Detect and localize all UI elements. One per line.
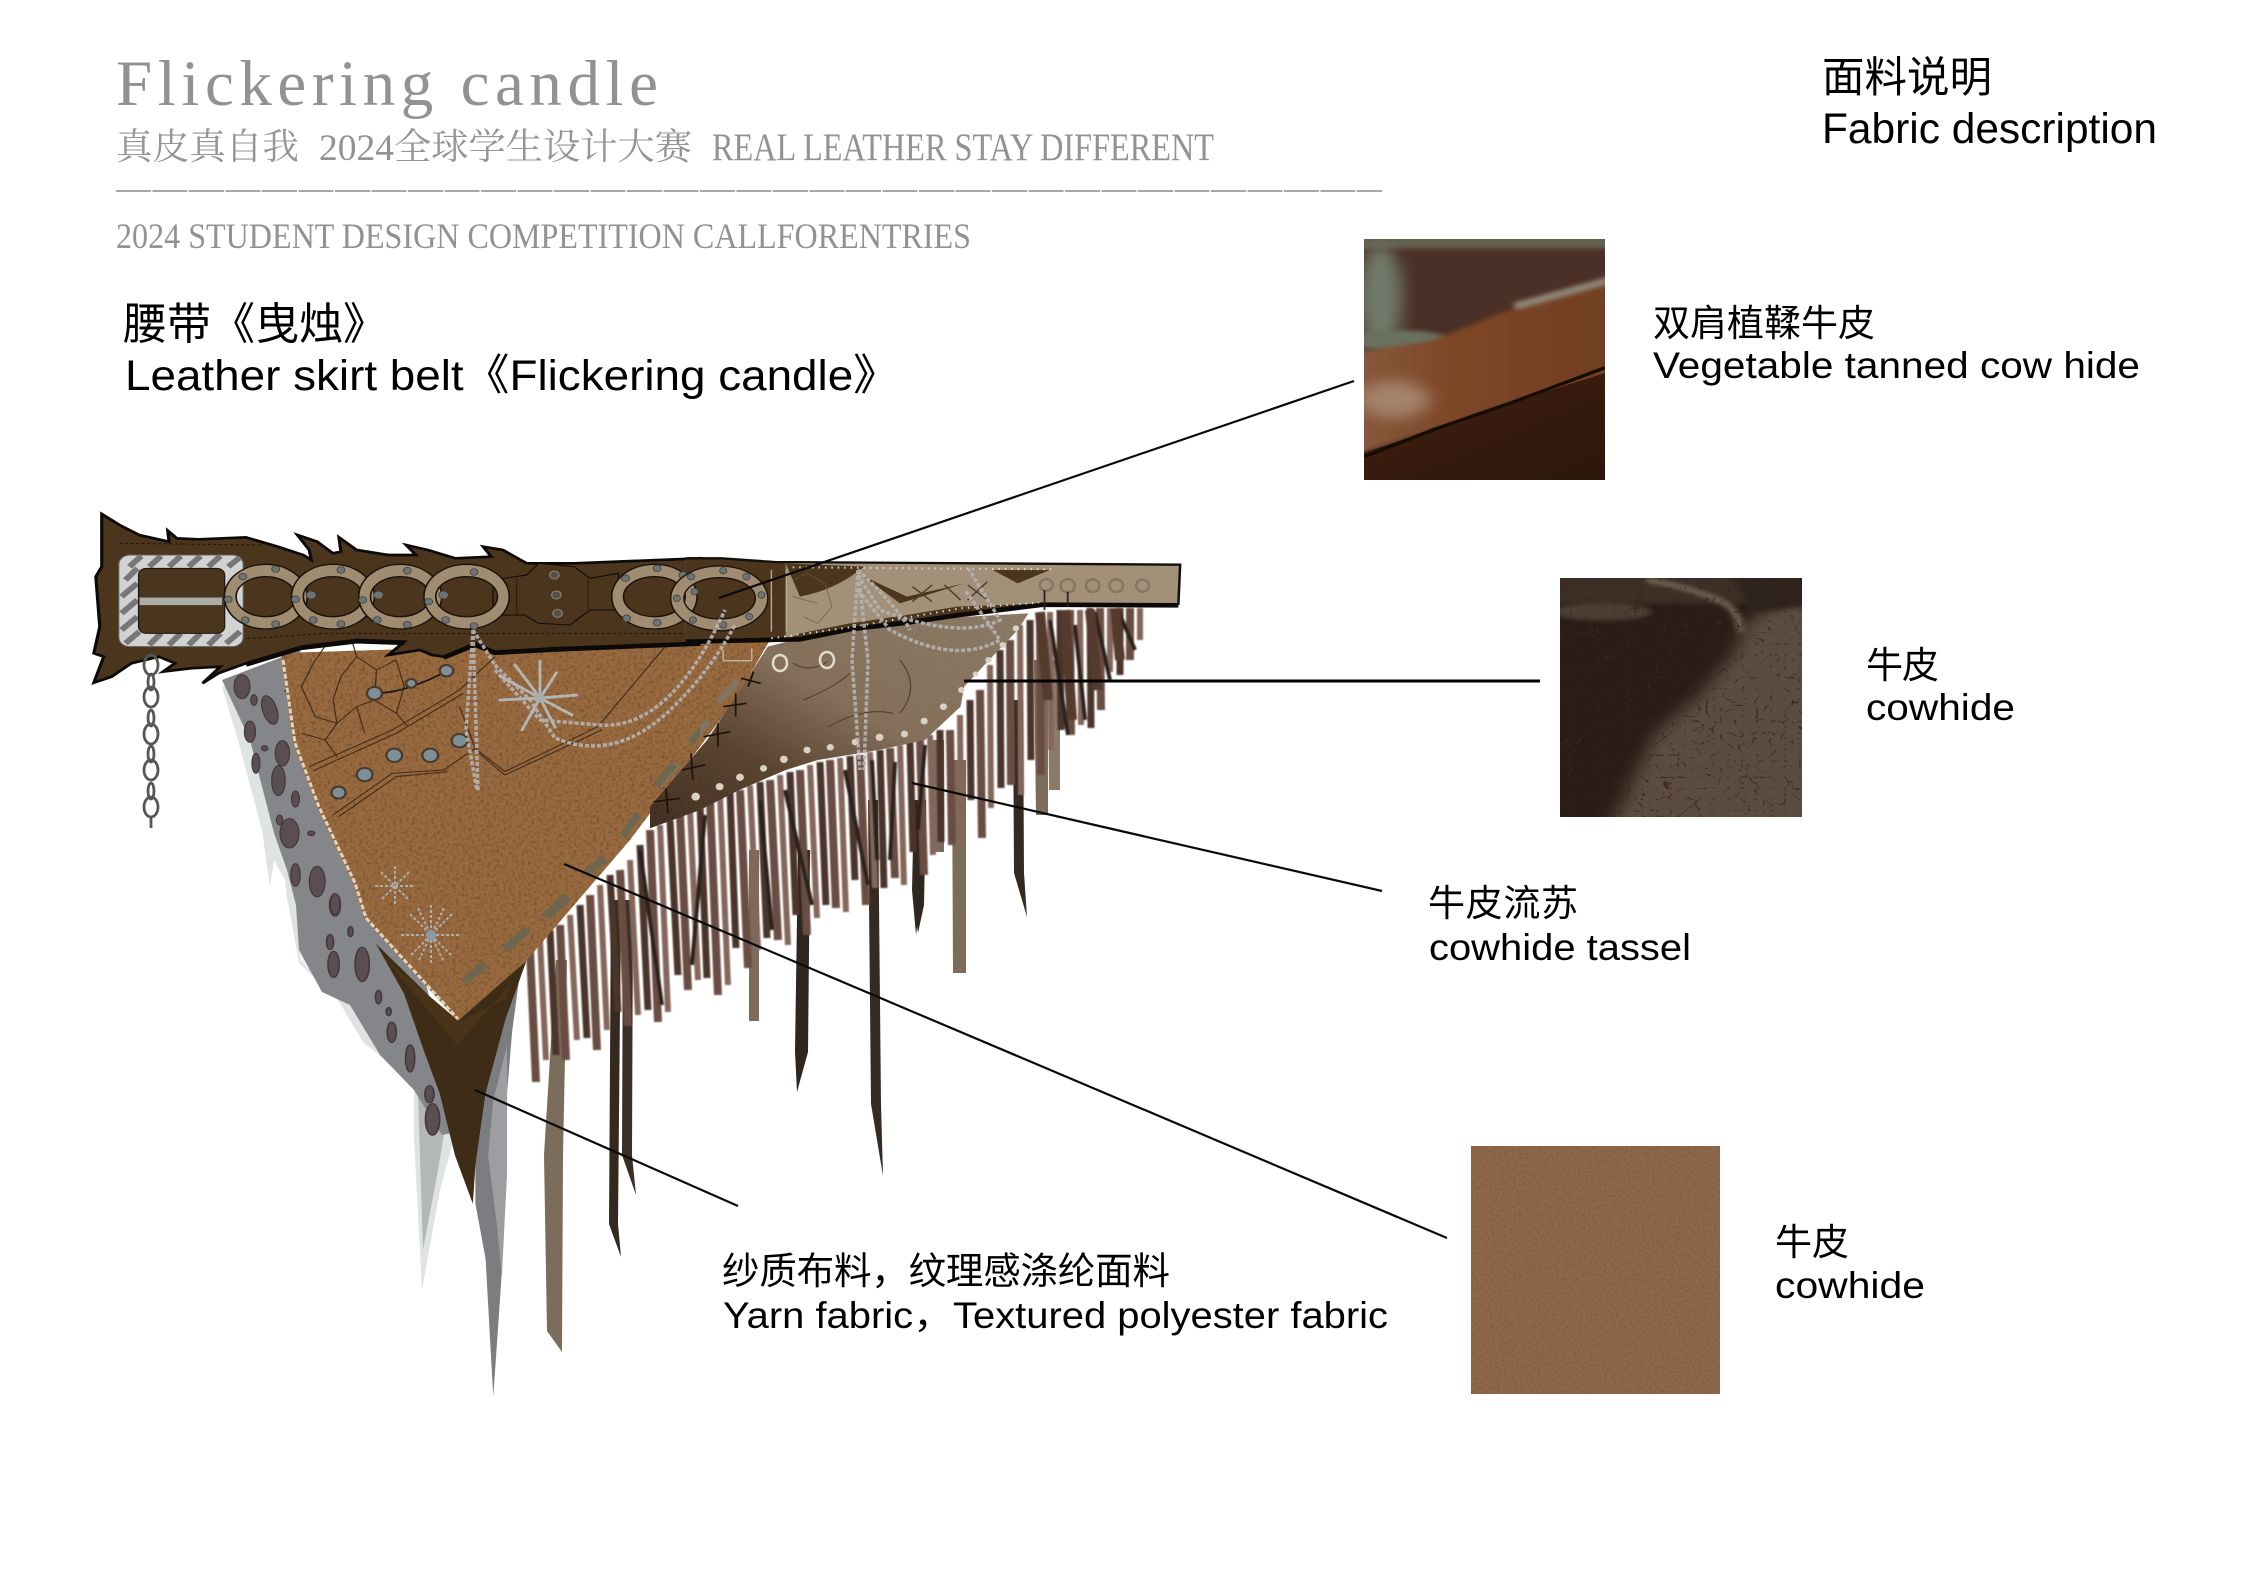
label: yarn fabric — [722, 1250, 1388, 1336]
studs on hem — [691, 625, 1019, 801]
label: cowhide: cowhide — [1866, 687, 2015, 728]
subtitle: competition name: 真皮真自我 — [116, 118, 299, 170]
swatch: brown cowhide — [1471, 1146, 1720, 1394]
leader line: yarn fabric — [475, 1090, 738, 1206]
stitches along panel edge — [460, 672, 761, 984]
heading: belt name: 腰带《曳烛》 — [123, 300, 387, 349]
belt chain rings — [224, 563, 768, 631]
leader line: vegetable tanned cow hide — [719, 381, 1354, 598]
long hanging strands — [544, 660, 1060, 1352]
leopard print panel — [222, 650, 456, 1135]
label: vegetable tanned cow hide — [1653, 303, 2140, 386]
grey fur layer — [222, 670, 455, 1290]
label: cowhide tassel: cowhide tassel — [1429, 927, 1691, 968]
label: yarn fabric: Yarn fabric，Textured polyester fabric — [723, 1295, 1388, 1336]
silver bead chains — [466, 568, 1000, 790]
dark brown V backing — [376, 944, 526, 1204]
swatch: dark cowhide — [1560, 578, 1802, 817]
label: cowhide: 牛皮 — [1866, 645, 1939, 686]
label: cowhide lower — [1775, 1222, 1925, 1306]
subtitle: competition name — [116, 118, 1214, 170]
subtitle: competition name: 全球学生设计大赛 — [394, 118, 692, 170]
label: cowhide tassel — [1428, 883, 1691, 968]
illustration: leather skirt belt — [94, 514, 1180, 1397]
label: cowhide lower: 牛皮 — [1775, 1222, 1849, 1263]
subtitle: competition name: 2024 — [319, 128, 394, 169]
leader line: cowhide — [964, 680, 1540, 682]
label: vegetable tanned cow hide: Vegetable tanned cow hide — [1653, 345, 2140, 386]
label: vegetable tanned cow hide: 双肩植鞣牛皮 — [1653, 303, 1875, 344]
cracks on dark cowhide — [1560, 578, 1802, 817]
heading: belt name: Leather skirt belt《Flickering candle》 — [125, 352, 899, 400]
long grey spike — [475, 963, 521, 1397]
heading: belt name — [123, 300, 899, 400]
seam stitching on main panel — [283, 660, 458, 1019]
eyelets on side panel — [773, 652, 834, 671]
hanging chain — [144, 655, 158, 828]
leader line: cowhide main panel — [564, 864, 1447, 1238]
fringe: cowhide tassel strips — [530, 608, 1140, 1082]
shaded cowhide side panel — [650, 613, 1028, 828]
subtitle: competition english: 2024 STUDENT DESIGN COMPETITION CALLFORENTRIES — [116, 216, 971, 256]
cracked leather and strap lines — [301, 643, 665, 817]
leader line: cowhide tassel — [912, 783, 1382, 891]
label: cowhide lower: cowhide — [1775, 1265, 1925, 1306]
small bead sunbursts — [375, 866, 461, 965]
swatch: vegetable tanned cow hide — [1364, 239, 1605, 480]
belt buckle — [119, 555, 243, 647]
heading: fabric description: 面料说明 — [1822, 55, 1992, 102]
label: yarn fabric: 纱质布料，纹理感涤纶面料 — [722, 1250, 1170, 1292]
main cowhide panel — [281, 640, 770, 1021]
title: Flickering candle — [116, 48, 658, 120]
silver bead sunburst — [500, 660, 577, 730]
heading: fabric description — [1822, 55, 2157, 153]
subtitle: competition name: REAL LEATHER STAY DIFFERENT — [712, 126, 1214, 169]
heading: fabric description: Fabric description — [1822, 105, 2157, 153]
label: cowhide tassel: 牛皮流苏 — [1428, 883, 1578, 924]
belt band — [94, 514, 1180, 683]
rivets on main panel — [331, 665, 467, 799]
label: cowhide — [1866, 645, 2015, 728]
